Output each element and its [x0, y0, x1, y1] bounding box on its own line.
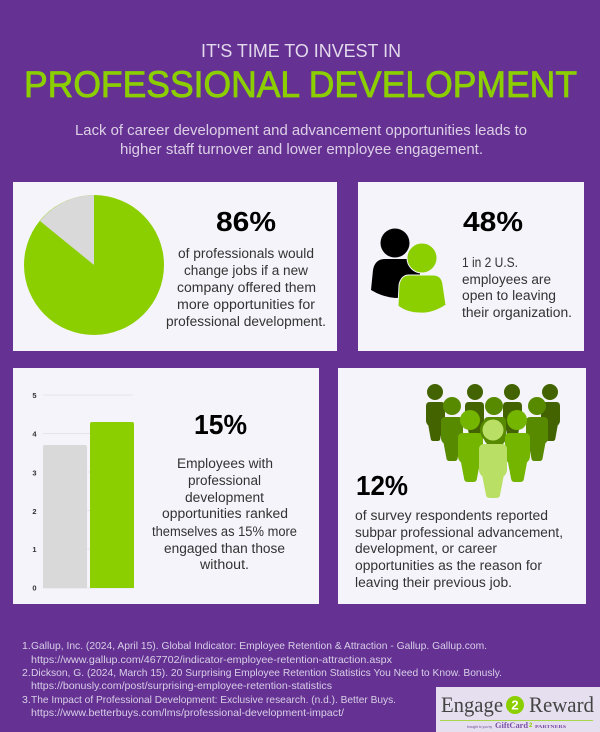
references: https://www.betterbuys.com/lms/professional-development-impact/	[31, 707, 344, 719]
text: 12% description	[355, 508, 563, 590]
text: 12% description: opportunities as the reason for	[355, 558, 543, 573]
text: 15% description: development	[185, 490, 264, 505]
pie chart	[24, 195, 164, 335]
bar chart: 5	[32, 391, 37, 400]
bar chart: 2	[32, 507, 37, 516]
title: IT'S TIME TO INVEST IN	[201, 40, 401, 61]
logo: Engage 2 Reward: Reward	[529, 692, 594, 717]
text: 15% description: themselves as 15% more	[152, 524, 297, 539]
subtitle: higher staff turnover and lower employee engagement.	[120, 142, 483, 158]
panel: 86% stat	[13, 182, 337, 351]
references: 3.	[22, 694, 31, 706]
text: 86% description: company offered them	[177, 280, 316, 295]
references	[22, 640, 502, 719]
references: Dickson, G. (2024, March 15). 20 Surprising Employee Retention Statistics You Need to Know. Bonusly.	[31, 667, 502, 679]
subtitle: Lack of career development and advancement opportunities leads to	[75, 123, 527, 139]
text: 15% description: engaged than those	[164, 541, 285, 556]
text: 86% description: change jobs if a new	[184, 263, 308, 278]
logo: Engage 2 Reward: 2	[529, 723, 533, 729]
stat: 86%: 86%	[216, 206, 276, 237]
logo: Engage 2 Reward: GiftCard	[495, 721, 529, 730]
text: 86% description: professional development.	[166, 314, 326, 329]
stat: 12%: 12%	[356, 470, 408, 501]
title: PROFESSIONAL DEVELOPMENT	[24, 64, 577, 105]
bar chart: 3	[32, 468, 37, 478]
stat: 48%: 48%	[463, 206, 523, 237]
references: 2.	[22, 667, 31, 679]
text: 15% description: Employees with	[177, 456, 273, 471]
text: 48% description: employees are	[462, 272, 551, 287]
text: 12% description: subpar professional advancement,	[355, 525, 563, 540]
icon: group of people	[426, 384, 560, 498]
text: 48% description: open to leaving	[462, 288, 556, 303]
subtitle	[75, 123, 527, 158]
logo: Engage 2 Reward: PARTNERS	[535, 724, 567, 729]
text: 86% description: more opportunities for	[177, 297, 316, 312]
bar chart: 1	[32, 545, 37, 554]
stat: 15%: 15%	[194, 409, 247, 440]
text: 15% description: without.	[199, 557, 249, 572]
text: 15% description: opportunities ranked	[162, 506, 288, 521]
text: 12% description: leaving their previous job.	[355, 575, 512, 590]
title	[24, 40, 577, 105]
panel: 12% stat	[338, 368, 586, 604]
text: 12% description: development, or career	[355, 541, 498, 556]
text: 12% description: of survey respondents reported	[355, 508, 548, 523]
references: 1.	[22, 640, 31, 652]
text: 48% description	[462, 255, 572, 320]
text: 48% description: 1 in 2 U.S.	[462, 255, 518, 270]
text: 15% description	[152, 456, 297, 572]
logo: Engage 2 Reward: Engage	[441, 692, 503, 717]
panel: 15% stat	[13, 368, 319, 604]
bar chart: 4	[32, 430, 37, 438]
bar chart	[32, 391, 134, 592]
references: The Impact of Professional Development: Exclusive research. (n.d.). Better Buys.	[31, 694, 396, 706]
text: 86% description	[166, 246, 326, 329]
logo: Engage 2 Reward: 2	[511, 698, 519, 712]
bar chart: 0	[32, 584, 37, 592]
logo: Engage 2 Reward	[436, 687, 600, 732]
text: 48% description: their organization.	[462, 305, 572, 320]
references: https://bonusly.com/post/surprising-employee-retention-statistics	[31, 680, 332, 692]
panel: 48% stat	[358, 182, 584, 351]
text: 86% description: of professionals would	[178, 246, 314, 261]
references: https://www.gallup.com/467702/indicator-employee-retention-attraction.aspx	[31, 654, 393, 666]
text: 15% description: professional	[188, 473, 261, 488]
references: Gallup, Inc. (2024, April 15). Global Indicator: Employee Retention & Attraction - Gallup. Gallup.com.	[31, 640, 487, 652]
logo: Engage 2 Reward: brought to you by	[467, 725, 492, 729]
icon: two people	[371, 228, 446, 313]
